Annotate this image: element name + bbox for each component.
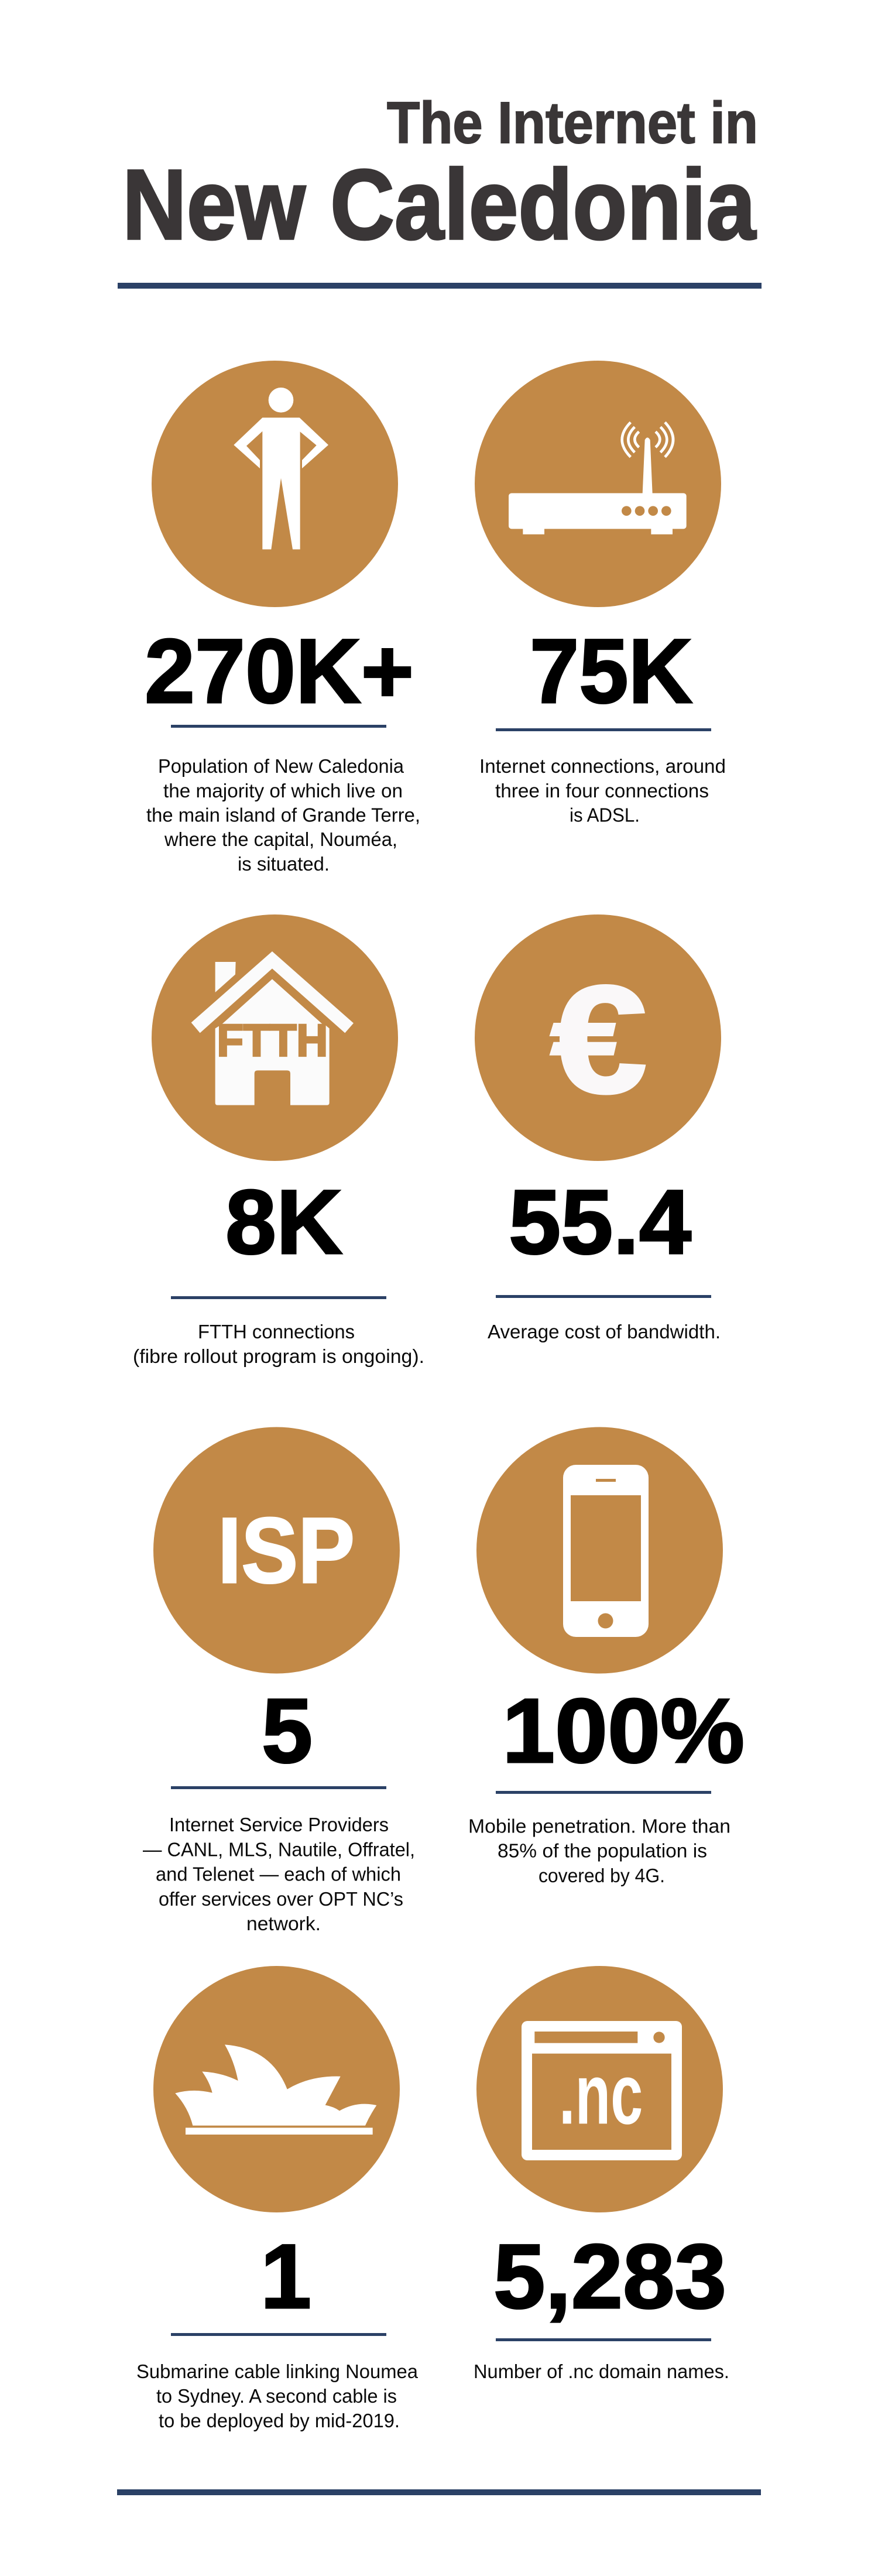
description: ISPs: and Telenet — each of which bbox=[156, 1864, 401, 1885]
description: ISPs: — CANL, MLS, Nautile, Offratel, bbox=[143, 1838, 415, 1861]
stat: 55.4: 55.4 bbox=[509, 1171, 691, 1273]
description: ISPs: Internet Service Providers bbox=[169, 1814, 389, 1835]
panel: bandwidth cost bbox=[475, 914, 721, 1342]
icon: euro bbox=[475, 914, 721, 1161]
description: submarine cable: to Sydney. A second cable is bbox=[156, 2385, 397, 2407]
description: population bbox=[146, 755, 420, 875]
icon: ISP: ISP bbox=[218, 1498, 355, 1602]
icon: euro: € bbox=[550, 954, 647, 1125]
description: FTTH: FTTH connections bbox=[198, 1321, 355, 1342]
description: FTTH: (fibre rollout program is ongoing). bbox=[133, 1345, 424, 1367]
icon: phone bbox=[476, 1427, 723, 1673]
title bbox=[122, 90, 758, 261]
description: ISPs: offer services over OPT NC’s bbox=[159, 1888, 403, 1910]
stat: 8K: 8K bbox=[225, 1171, 342, 1273]
description: mobile penetration bbox=[468, 1815, 730, 1886]
stat: 100%: 100% bbox=[502, 1680, 745, 1782]
description: internet connections bbox=[479, 755, 726, 825]
icon: ISP bbox=[153, 1427, 400, 1673]
title: The Internet in bbox=[387, 90, 758, 156]
panel: internet connections bbox=[475, 361, 726, 825]
stat: 5: 5 bbox=[262, 1680, 313, 1782]
description: bandwidth cost: Average cost of bandwidth. bbox=[488, 1321, 721, 1342]
panel: submarine cable bbox=[136, 1966, 419, 2431]
icon: house bbox=[152, 914, 398, 1161]
icon: router bbox=[475, 361, 721, 607]
description: internet connections: is ADSL. bbox=[570, 804, 640, 825]
panel: population bbox=[145, 361, 420, 875]
description: submarine cable bbox=[136, 2361, 419, 2431]
description: domain names: Number of .nc domain names. bbox=[474, 2361, 729, 2382]
icon: house: FTTH bbox=[217, 1016, 328, 1066]
description: mobile penetration: 85% of the population is bbox=[498, 1840, 707, 1862]
title: New Caledonia bbox=[122, 149, 756, 261]
panel: FTTH bbox=[133, 914, 424, 1367]
description: mobile penetration: Mobile penetration. More than bbox=[468, 1815, 730, 1837]
panel: domain names bbox=[474, 1966, 729, 2382]
description: submarine cable: to be deployed by mid-2019. bbox=[159, 2410, 400, 2431]
description: population: where the capital, Nouméa, bbox=[164, 828, 397, 850]
icon: browser window .nc: .nc bbox=[559, 2046, 643, 2142]
description: population: the main island of Grande Terre, bbox=[146, 804, 420, 825]
stat: 270K+: 270K+ bbox=[145, 621, 414, 722]
stat: 1: 1 bbox=[260, 2226, 311, 2328]
panel: mobile penetration bbox=[468, 1427, 745, 1886]
description: mobile penetration: covered by 4G. bbox=[539, 1865, 665, 1886]
description: FTTH bbox=[133, 1321, 424, 1367]
description: ISPs: network. bbox=[246, 1913, 321, 1934]
panel: ISPs bbox=[143, 1427, 415, 1934]
description: population: is situated. bbox=[238, 853, 330, 875]
stat: 5,283: 5,283 bbox=[493, 2226, 726, 2328]
icon: Sydney Opera House bbox=[153, 1966, 400, 2212]
description: population: the majority of which live on bbox=[163, 780, 403, 801]
description: ISPs bbox=[143, 1814, 415, 1934]
icon: browser window .nc bbox=[476, 1966, 723, 2212]
icon: person bbox=[152, 361, 398, 607]
description: submarine cable: Submarine cable linking Noumea bbox=[136, 2361, 419, 2382]
description: internet connections: Internet connections, around bbox=[479, 755, 726, 777]
stat: 75K: 75K bbox=[530, 621, 692, 722]
description: population: Population of New Caledonia bbox=[158, 755, 404, 777]
description: internet connections: three in four connections bbox=[495, 780, 709, 801]
